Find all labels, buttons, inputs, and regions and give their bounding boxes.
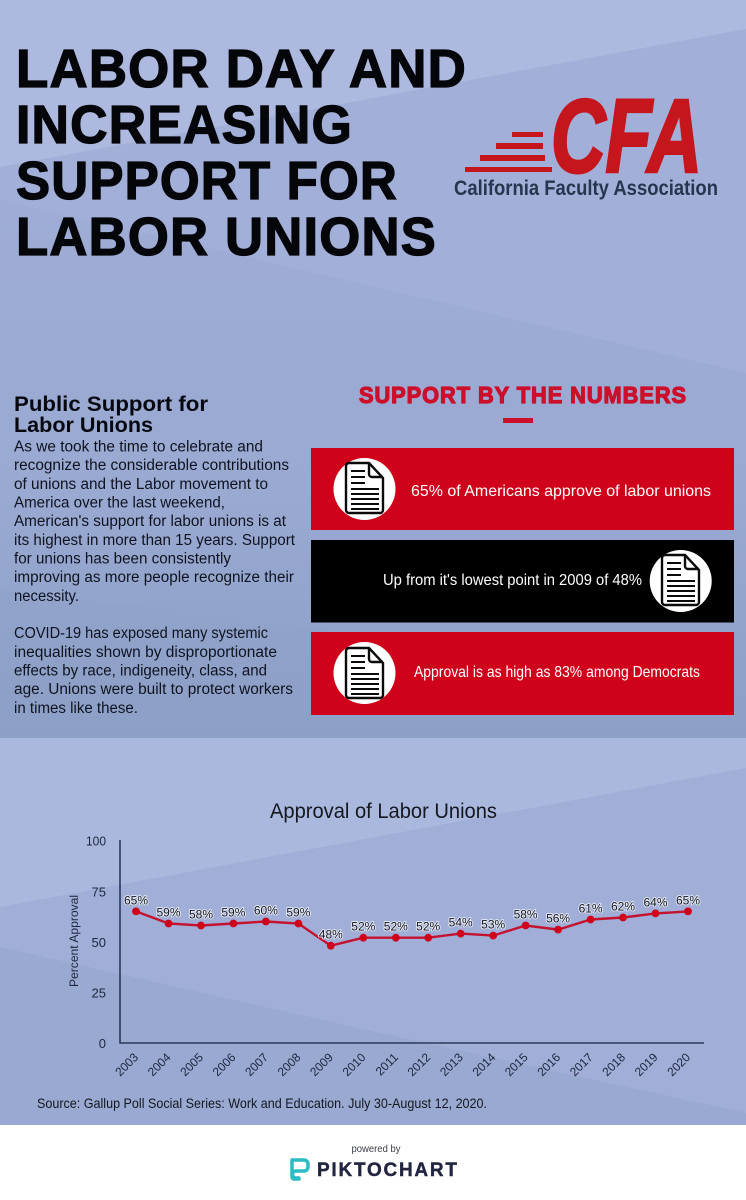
y axis labels: 100 [86,834,106,848]
panel: stat 65 percent [311,448,734,530]
data labels: 64% [643,895,668,909]
data labels: 52% [384,920,408,934]
icon: document [346,648,383,698]
title: INCREASING [16,95,353,155]
data labels: 59% [286,906,311,920]
text block: public support body: age. Unions were built to protect workers [14,681,293,698]
data labels: 59% [221,906,246,920]
text block: public support body: improving as more people recognize their [14,569,294,586]
text block: public support body [14,438,296,717]
y axis title: Percent Approval [67,895,81,987]
panel: stat 65 percent: 65% of Americans approve of labor unions [411,483,711,500]
text block: public support body: American's support for labor unions is at [14,513,287,530]
footer: powered by piktochart [292,1143,457,1181]
x axis labels [112,1050,693,1079]
heading: public support [14,392,209,437]
data labels: 60% [254,904,278,918]
y axis labels: 75 [92,884,106,900]
panel: stat democrats: Approval is as high as 83% among Democrats [414,664,700,681]
data line [136,911,688,946]
chart: approval of labor unions [67,800,704,1079]
data labels: 56% [546,912,570,926]
panel: stat democrats [311,632,734,715]
x axis labels: 2010 [340,1050,369,1079]
text block: public support body: its highest in more than 15 years. Support [14,532,296,549]
icon: piktochart logo [292,1160,308,1179]
data labels: 54% [449,916,473,930]
data labels: 65% [676,893,700,907]
panel: chart background [0,738,746,1126]
y axis labels [86,834,106,1051]
data labels: 53% [481,918,506,932]
x axis labels: 2014 [470,1050,499,1079]
data labels: 65% [124,893,148,907]
x axis labels: 2018 [599,1050,628,1079]
x axis labels: 2004 [145,1050,174,1079]
heading underline [503,418,533,423]
title: LABOR UNIONS [16,207,437,267]
data labels: 62% [611,900,635,914]
text block: public support body: As we took the time to celebrate and [14,438,263,456]
footer: powered by piktochart: powered by [352,1143,401,1155]
text block: public support body: of unions and the Labor movement to [14,476,268,493]
data labels: 58% [514,908,538,922]
heading: support by the numbers: SUPPORT BY THE NUMBERS [359,382,687,408]
text block: public support body: recognize the considerable contributions [14,457,289,474]
logo: California Faculty Association [454,79,718,200]
x axis labels: 2011 [373,1050,401,1078]
data labels: 52% [351,920,376,934]
panel: header and support background [0,0,746,739]
x axis labels: 2008 [275,1050,304,1079]
icon: document [662,555,699,605]
title: LABOR DAY AND [16,39,467,99]
data labels [124,893,700,942]
text block: public support body: inequalities shown by disproportionate [14,644,277,661]
heading: public support: Labor Unions [14,413,153,437]
data labels: 59% [156,906,181,920]
text block: public support body: necessity. [14,588,79,605]
panel: stat lowest point [311,540,734,622]
x axis labels: 2015 [502,1050,531,1079]
panel: stat lowest point: Up from it's lowest point in 2009 of 48% [383,572,642,589]
logo: California Faculty Association: California Faculty Association [454,177,718,200]
x axis labels: 2007 [242,1050,271,1079]
x axis labels: 2017 [567,1050,596,1079]
data labels: 52% [416,920,441,934]
text block: public support body: America over the last weekend, [14,494,225,512]
icon: document [346,463,383,513]
text block: public support body: for unions has been consistently [14,550,231,568]
x axis labels: 2019 [632,1050,661,1079]
data points [132,908,692,950]
x axis labels: 2012 [405,1050,434,1079]
text block: public support body: COVID-19 has exposed many systemic [14,625,268,642]
x axis labels: 2009 [307,1050,336,1079]
y axis labels: 25 [92,986,106,1000]
title: SUPPORT FOR [16,151,398,211]
text block: public support body: in times like these. [14,700,138,717]
x axis labels: 2003 [112,1050,141,1079]
x axis labels: 2005 [177,1050,206,1079]
footer: powered by piktochart: PIKTOCHART [317,1160,457,1181]
heading: public support: Public Support for [14,392,209,416]
x axis labels: 2006 [210,1050,239,1079]
x axis labels: 2016 [534,1050,563,1079]
title [16,39,467,267]
x axis labels: 2013 [437,1050,466,1079]
y axis labels: 0 [99,1036,106,1051]
data labels: 58% [189,908,213,922]
data labels: 61% [579,902,603,916]
panel: footer background [0,1125,746,1200]
chart title: Approval of Labor Unions [270,800,497,823]
axes [120,840,704,1043]
y axis labels: 50 [92,935,106,950]
text block: public support body: effects by race, indigeneity, class, and [14,662,267,680]
source note: Source: Gallup Poll Social Series: Work and Education. July 30-August 12, 2020. [37,1095,487,1111]
x axis labels: 2020 [664,1050,693,1079]
data labels: 48% [319,928,343,942]
